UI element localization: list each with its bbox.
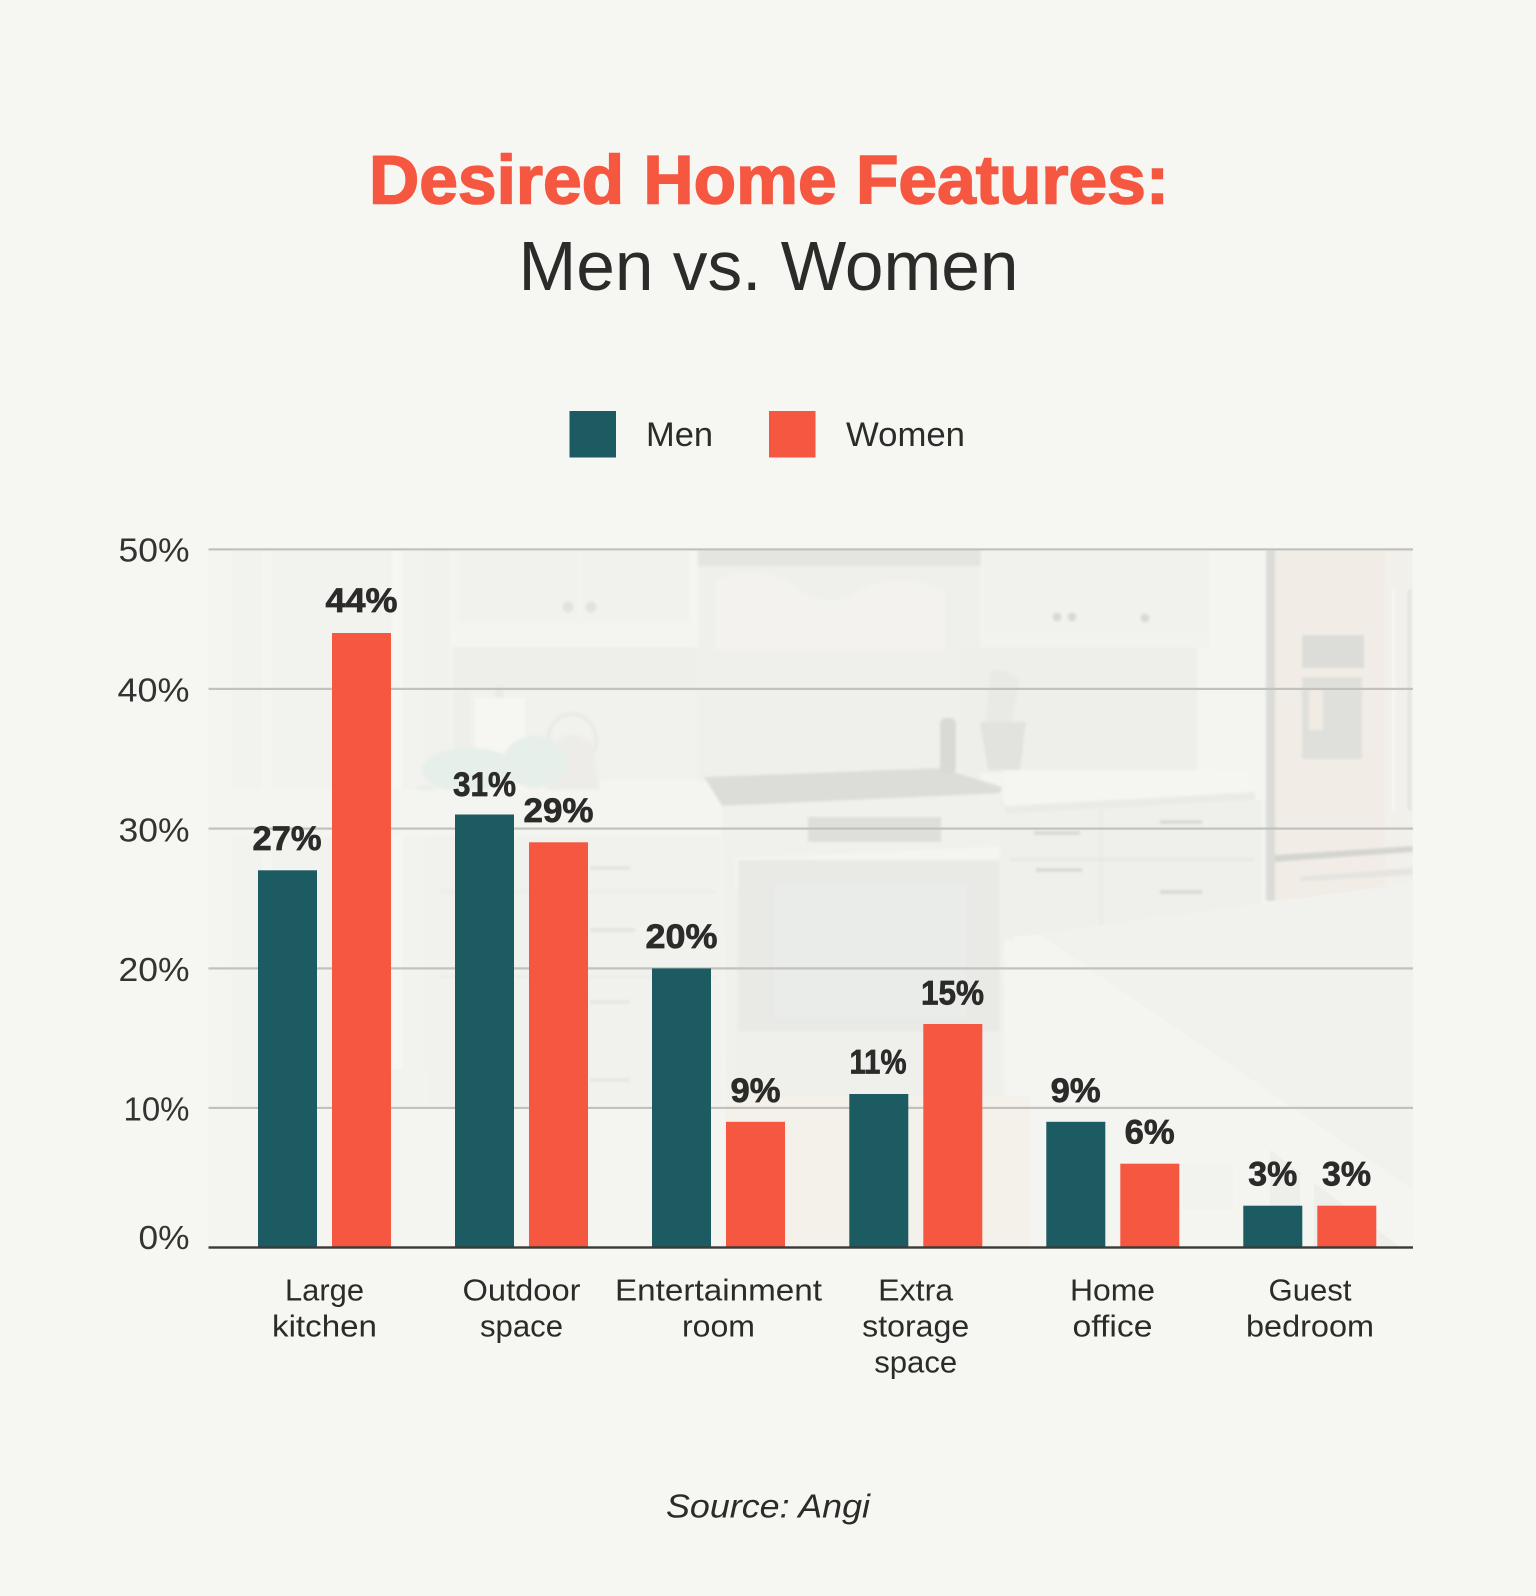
bar chart bbox=[118, 532, 1413, 1380]
x axis labels: space bbox=[480, 1309, 563, 1344]
x axis labels: Entertainment bbox=[615, 1273, 822, 1308]
group: outdoor space: 31% bbox=[453, 766, 516, 804]
y axis labels: 0% bbox=[138, 1219, 190, 1256]
title bbox=[369, 142, 1169, 305]
x axis labels: room bbox=[682, 1309, 755, 1344]
x axis labels: Extra bbox=[878, 1273, 954, 1308]
y axis labels: 40% bbox=[118, 672, 190, 708]
island countertop bbox=[1013, 883, 1413, 1247]
group: extra storage space: 15% bbox=[921, 974, 984, 1012]
x axis labels: storage bbox=[862, 1309, 969, 1344]
x axis labels: office bbox=[1072, 1309, 1152, 1344]
y axis labels bbox=[118, 532, 190, 1256]
faded kitchen photo behind chart bbox=[418, 550, 1413, 1082]
x axis labels: Home bbox=[1070, 1273, 1155, 1308]
legend bbox=[570, 411, 965, 458]
y axis labels: 50% bbox=[118, 532, 190, 568]
group: entertainment room bbox=[646, 918, 785, 1248]
x axis labels: space bbox=[874, 1345, 957, 1380]
x axis labels: kitchen bbox=[272, 1309, 377, 1344]
group: extra storage space bbox=[849, 974, 984, 1248]
y axis labels: 30% bbox=[118, 812, 190, 848]
group: large kitchen: 44% bbox=[326, 582, 398, 620]
legend label: women: Women bbox=[846, 416, 965, 454]
x axis labels: Outdoor bbox=[462, 1273, 580, 1308]
legend label: men: Men bbox=[646, 416, 713, 454]
y axis labels: 20% bbox=[118, 951, 190, 988]
group: entertainment room: 20% bbox=[646, 918, 718, 956]
group: home office: 9% bbox=[1051, 1072, 1101, 1110]
group: large kitchen bbox=[252, 582, 398, 1248]
title line 1: Desired Home Features: bbox=[369, 142, 1169, 218]
group: home office bbox=[1046, 1072, 1179, 1248]
x axis labels: bedroom bbox=[1246, 1309, 1374, 1344]
x axis labels: Guest bbox=[1268, 1273, 1352, 1308]
group: guest bedroom bbox=[1243, 1156, 1376, 1248]
group: large kitchen: 27% bbox=[252, 820, 322, 858]
title line 2: Men vs. Women bbox=[518, 227, 1018, 305]
group: outdoor space bbox=[453, 766, 594, 1248]
x axis labels bbox=[272, 1273, 1374, 1380]
x axis labels: Large bbox=[285, 1273, 364, 1308]
y axis labels: 10% bbox=[124, 1090, 190, 1128]
infographic canvas bbox=[118, 152, 1413, 1524]
legend swatch: men bbox=[570, 411, 616, 458]
source note: Source: Angi bbox=[666, 1488, 872, 1525]
group: guest bedroom: 3% bbox=[1322, 1156, 1371, 1194]
group: extra storage space: 11% bbox=[850, 1044, 906, 1082]
legend swatch: women bbox=[769, 411, 816, 458]
group: entertainment room: 9% bbox=[730, 1072, 780, 1110]
group: guest bedroom: 3% bbox=[1248, 1156, 1297, 1194]
group: home office: 6% bbox=[1125, 1114, 1175, 1152]
group: outdoor space: 29% bbox=[524, 792, 594, 830]
